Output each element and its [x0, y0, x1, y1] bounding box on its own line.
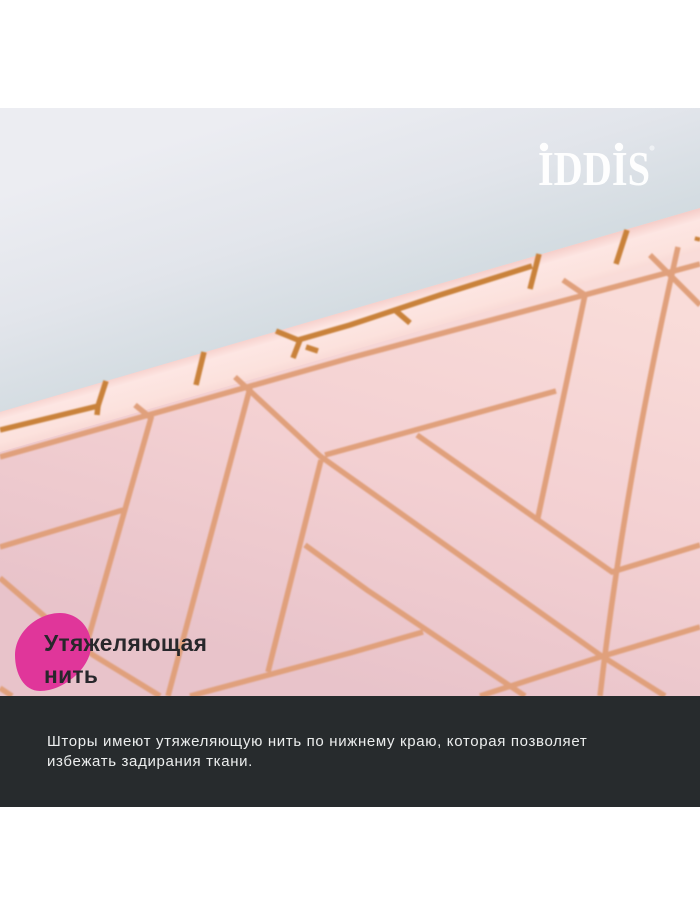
description text: Шторы имеют утяжеляющую нить по нижнему краю, которая позволяет — [47, 733, 587, 750]
wall background — [0, 108, 700, 412]
description text: избежать задирания ткани. — [47, 753, 253, 770]
heading: Утяжеляющая — [44, 630, 207, 656]
heading: нить — [44, 662, 98, 688]
orange hem pattern — [0, 230, 698, 430]
hem fold — [0, 208, 700, 452]
product photo: curtain hem with geometric pattern — [0, 108, 700, 696]
heading — [44, 630, 207, 688]
pink blob marker — [15, 613, 91, 691]
light pattern lines — [0, 247, 700, 696]
panel: description — [0, 696, 700, 807]
curtain fabric — [0, 208, 700, 696]
description text — [47, 733, 587, 770]
logo: IDDIS: IDDIS — [538, 141, 650, 196]
